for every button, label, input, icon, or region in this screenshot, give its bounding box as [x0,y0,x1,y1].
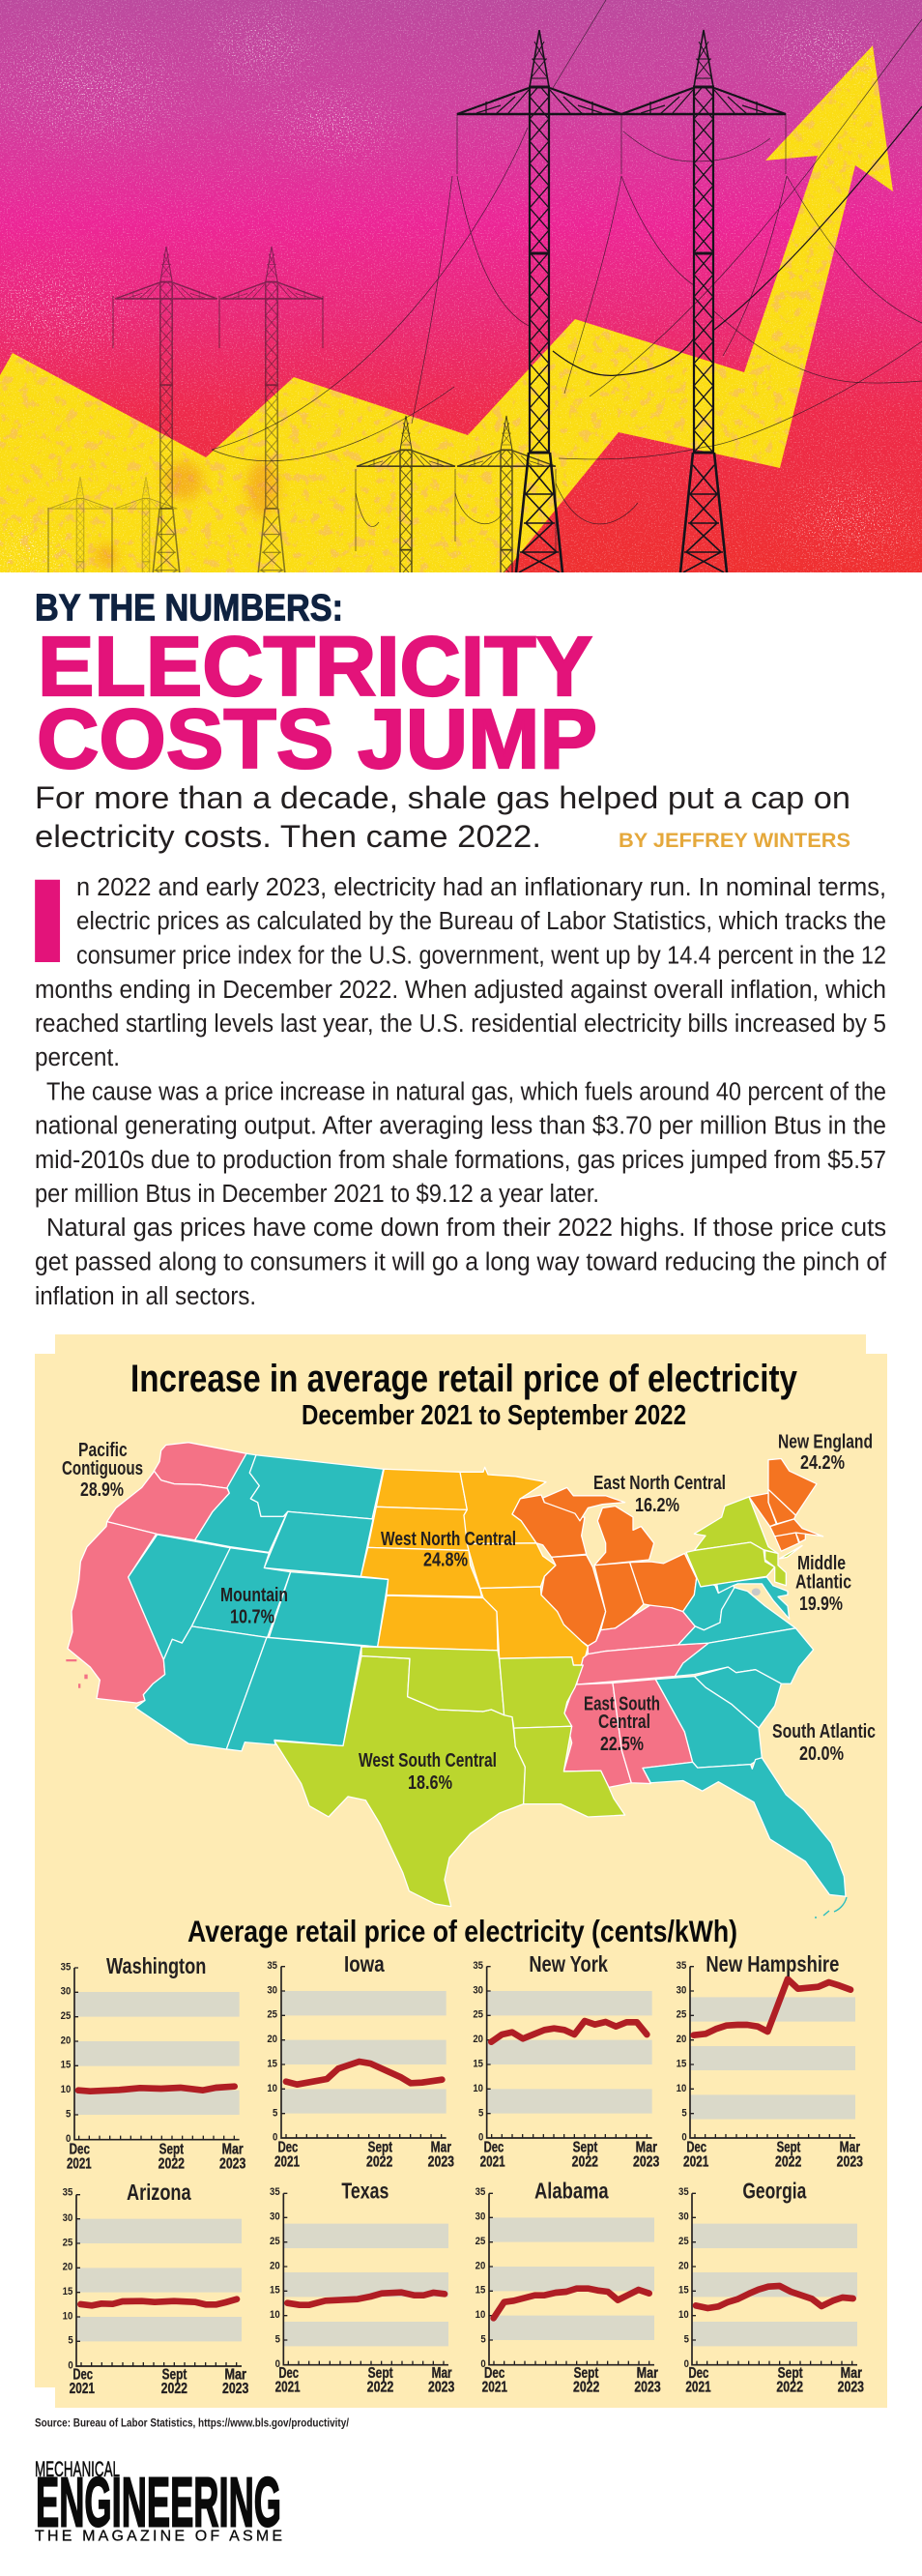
chart: Arizona: Sept [162,2367,187,2384]
paper speckle texture [0,0,922,572]
chart: New Hampshire: 20 [677,2034,686,2045]
chart: Alabama: Mar [637,2365,658,2382]
chart: Texas: Texas [341,2179,389,2204]
chart: New Hampshire: 2022 [775,2153,801,2170]
map labels: West North Central [381,1529,516,1550]
chart: Georgia: Georgia [742,2179,807,2204]
article text: Natural gas prices have come down from their 2022 highs. If those price cuts [46,1215,886,1242]
chart: Georgia: 2023 [838,2379,864,2395]
map labels: New England [778,1431,873,1452]
chart: New York: 10 [473,2083,483,2094]
chart: Arizona: 25 [63,2237,72,2248]
chart: Washington: Sept [159,2141,184,2157]
map labels: Middle [797,1553,846,1574]
chart: Washington: 35 [61,1961,71,1973]
hero illustration: power lines over rising arrow [0,0,922,572]
chart: Georgia: 2022 [776,2379,803,2395]
chart: Georgia [678,2179,864,2395]
map labels: Atlantic [795,1572,851,1594]
chart: New York: 20 [473,2034,483,2045]
map labels: 18.6% [408,1772,452,1794]
chart section title: Average retail price of electricity (cents/kWh) [187,1914,737,1948]
chart: Arizona: 0 [68,2359,73,2371]
chart: Iowa: 2021 [274,2153,300,2170]
chart: New York: Mar [636,2139,657,2155]
chart: Georgia: 0 [684,2358,689,2370]
chart: Alabama: 25 [475,2236,485,2247]
chart: Georgia: Mar [841,2365,862,2382]
chart: New Hampshire: 35 [677,1960,686,1972]
article text: national generating output. After averaging less than $3.70 per million Btus in the [35,1113,886,1140]
chart: New York: 2022 [572,2153,598,2170]
chart: Georgia: 20 [678,2260,689,2271]
chart: New Hampshire: 2023 [837,2153,863,2170]
map title: Increase in average retail price of electricity [130,1358,798,1400]
chart: Georgia: 25 [678,2236,689,2247]
region: Pacific Contiguous [66,1443,246,1703]
chart: Texas: 15 [270,2285,280,2297]
chart: Iowa [267,1951,454,2170]
chart: Alabama: 5 [480,2333,486,2345]
chart: Georgia: 5 [684,2333,689,2345]
chart: Arizona: 2023 [222,2381,248,2397]
chart: Iowa: 30 [267,1984,277,1996]
chart: Iowa: 5 [273,2107,277,2119]
chart: Alabama: 0 [480,2358,486,2370]
chart: Texas: 30 [270,2211,280,2223]
map labels: Central [598,1712,650,1733]
chart: New Hampshire: Mar [840,2139,860,2155]
chart: Iowa: 20 [267,2034,277,2045]
logo: Mechanical Engineering: MECHANICAL [35,2457,120,2481]
map labels: Contiguous [62,1458,143,1479]
chart: Washington: 20 [61,2034,71,2046]
chart: Washington: 2022 [158,2155,185,2172]
chart: New Hampshire: 15 [677,2058,686,2069]
chart: New York [473,1951,659,2170]
chart: Alabama: 2021 [482,2379,507,2395]
chart: Arizona: 2021 [70,2381,95,2397]
chart: Iowa: Mar [431,2139,451,2155]
map labels: West South Central [359,1750,497,1771]
chart: Texas: 25 [270,2236,280,2247]
article text [35,874,887,1310]
chart: Arizona: 2022 [161,2381,187,2397]
source note: Source: Bureau of Labor Statistics, https://www.bls.gov/productivity/ [35,2416,350,2430]
chart: Alabama [475,2179,661,2395]
headline: COSTS JUMP [37,692,597,786]
chart: Georgia: Dec [688,2365,709,2382]
chart: Arizona: 30 [63,2212,72,2224]
chart: New Hampshire: New Hampshire [706,1951,839,1976]
map labels: 20.0% [799,1743,844,1765]
chart: Texas: 0 [275,2358,280,2370]
article text: reached startling levels last year, the U.S. residential electricity bills increased by 5 [35,1010,886,1038]
power line wires [48,0,922,572]
chart: Georgia: Sept [778,2365,803,2382]
map labels: South Atlantic [772,1721,876,1742]
US map by region [66,1443,847,1917]
chart: Alabama: 15 [475,2285,485,2297]
map subtitle: December 2021 to September 2022 [302,1400,686,1431]
chart: Iowa: Iowa [344,1951,385,1976]
chart: Arizona: Mar [224,2367,246,2384]
chart: Washington: 2021 [67,2155,92,2172]
chart: Washington: 10 [61,2084,71,2095]
chart: Washington: 30 [61,1985,71,1997]
chart: Alabama: 10 [475,2309,485,2321]
chart: Texas: 2021 [275,2379,301,2395]
region: South Atlantic [643,1577,846,1896]
chart: Arizona: 20 [63,2262,72,2273]
chart: New York: 2023 [633,2153,659,2170]
region: West North Central [360,1467,588,1665]
chart: New York: Dec [484,2139,504,2155]
chart: Iowa: 15 [267,2058,277,2069]
chart: Alabama: 30 [475,2211,485,2223]
chart: New York: 35 [473,1960,483,1972]
map labels: 28.9% [80,1479,124,1501]
chart: Washington: Mar [222,2141,244,2157]
map labels: 24.2% [800,1452,845,1474]
chart: New Hampshire: 5 [681,2107,687,2119]
chart: Washington: 25 [61,2010,71,2022]
chart: Texas: 2022 [367,2379,393,2395]
subhead: electricity costs. Then came 2022. [35,819,541,854]
logo: Mechanical Engineering: THE MAGAZINE OF ASME [35,2528,282,2545]
rising yellow arrow [0,45,893,572]
region: Mountain [129,1453,389,1751]
chart: Texas: 35 [270,2186,280,2198]
chart: Iowa: 2023 [428,2153,454,2170]
chart: New York: 2021 [480,2153,505,2170]
map labels: Mountain [220,1585,288,1606]
chart: Washington: 0 [66,2133,71,2145]
chart: New York: 30 [473,1984,483,1996]
chart: Washington: Washington [106,1953,206,1978]
chart: New York: Sept [573,2139,597,2155]
chart: Georgia: 2021 [685,2379,711,2395]
map labels: 16.2% [635,1495,679,1516]
subhead [35,780,850,854]
chart: New York: 0 [478,2131,483,2143]
chart: Iowa: 2022 [366,2153,392,2170]
chart: New York: New York [529,1951,608,1976]
article text: mid-2010s due to production from shale formations, gas prices jumped from $5.57 [35,1147,886,1174]
map labels: 22.5% [600,1734,644,1755]
faded pair of towers [115,247,323,583]
chart: Iowa: 25 [267,2009,277,2021]
Florida Keys [815,1897,847,1917]
chart: Alabama: Alabama [534,2179,609,2204]
chart: Georgia: 15 [678,2285,689,2297]
Washington DC marker [752,1588,761,1595]
chart: New Hampshire: 30 [677,1984,686,1996]
large pair of towers [457,30,786,572]
subhead: For more than a decade, shale gas helped put a cap on [35,780,850,815]
article text: electric prices as calculated by the Bureau of Labor Statistics, which tracks the [76,908,886,935]
smallest pair of towers [48,477,178,572]
article text: n 2022 and early 2023, electricity had an inflationary run. In nominal terms, [76,874,886,901]
article text: per million Btus in December 2021 to $9.12 a year later. [35,1181,599,1208]
region: East North Central [512,1487,697,1646]
chart: Georgia: 30 [678,2211,689,2223]
chart: Alabama: 2023 [634,2379,661,2395]
headline: ELECTRICITY [38,620,592,714]
chart: Texas: Mar [432,2365,452,2382]
article text: months ending in December 2022. When adjusted against overall inflation, which [35,977,886,1004]
logo: Mechanical Engineering [35,2457,282,2545]
chart: Washington: 5 [66,2108,71,2120]
chart: Iowa: Sept [368,2139,392,2155]
region: New England [749,1459,823,1551]
chart: Arizona: 10 [63,2310,72,2322]
chart: Alabama: Dec [484,2365,505,2382]
chart: Texas: 2023 [428,2379,454,2395]
chart: Arizona [63,2180,248,2397]
map labels: East North Central [593,1473,726,1494]
chart: New Hampshire: 10 [677,2083,686,2094]
chart: Washington: 15 [61,2060,71,2071]
chart: New Hampshire [677,1951,863,2170]
kicker: by the numbers: BY THE NUMBERS: [35,588,343,629]
chart: Texas [270,2179,454,2395]
chart: Texas: Sept [368,2365,393,2382]
chart: Washington: Dec [70,2141,90,2157]
logo: Mechanical Engineering: ENGINEERING [36,2464,281,2541]
article text: get passed along to consumers it will go a long way toward reducing the pinch of [35,1249,887,1276]
chart: Texas: 5 [275,2333,280,2345]
panel: cream background [35,1334,887,2408]
chart: Washington: 2023 [219,2155,245,2172]
article text: inflation in all sectors. [35,1283,256,1310]
map labels: Pacific [78,1440,128,1461]
chart: Alabama: 20 [475,2260,485,2271]
headline [37,620,597,786]
region: West South Central [274,1647,625,1907]
article text: percent. [35,1044,120,1071]
chart: Texas: 20 [270,2260,280,2271]
map labels: 24.8% [423,1549,468,1570]
chart: Georgia: 35 [678,2186,689,2198]
middle pair of towers [356,416,557,572]
chart: Georgia: 10 [678,2309,689,2321]
map labels: East South [584,1694,660,1715]
byline: BY JEFFREY WINTERS [619,829,850,852]
map labels: 19.9% [799,1594,843,1615]
map labels [62,1431,876,1794]
chart: Iowa: 0 [273,2131,277,2143]
chart: Arizona: Dec [72,2367,93,2384]
drop cap: I [23,854,72,987]
chart: New Hampshire: 2021 [683,2153,709,2170]
region: Middle Atlantic [686,1497,802,1587]
chart: Iowa: Dec [278,2139,299,2155]
chart: Arizona: 15 [63,2286,72,2298]
map labels: 10.7% [230,1607,274,1628]
chart: New York: 25 [473,2009,483,2021]
region: East South Central [563,1605,708,1787]
chart: New Hampshire: Dec [686,2139,706,2155]
chart: New Hampshire: 0 [681,2131,687,2143]
chart: Arizona: 5 [68,2335,73,2347]
chart: New York: 5 [478,2107,483,2119]
chart: New Hampshire: Sept [777,2139,800,2155]
chart: Iowa: 10 [267,2083,277,2094]
chart: New Hampshire: 25 [677,2009,686,2021]
chart: Texas: 10 [270,2309,280,2321]
chart: Alabama: 35 [475,2186,485,2198]
chart: Texas: Dec [278,2365,299,2382]
chart: Washington [61,1953,245,2172]
chart: Alabama: Sept [574,2365,598,2382]
chart: Arizona: 35 [63,2187,72,2199]
chart: Iowa: 35 [267,1960,277,1972]
chart: Arizona: Arizona [127,2180,191,2205]
chart: Alabama: 2022 [573,2379,599,2395]
chart: New York: 15 [473,2058,483,2069]
